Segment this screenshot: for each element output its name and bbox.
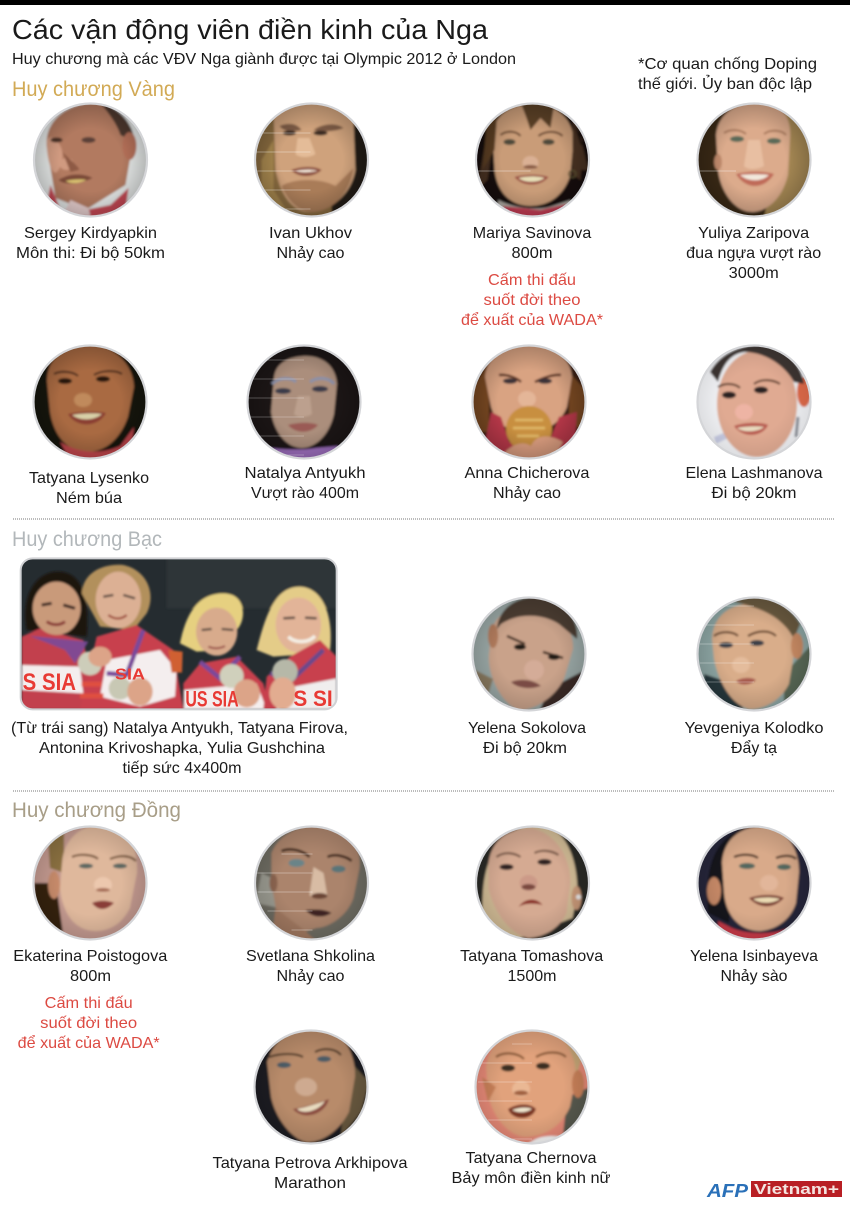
ban note: Cấm thi đấu <box>488 272 576 289</box>
panel: bronze medals <box>12 799 818 1192</box>
name and event <box>684 720 824 757</box>
athlete: Sergey Kirdyapkin <box>16 102 165 262</box>
name and event <box>686 225 821 282</box>
heading: silver: Huy chương Bạc <box>12 528 162 551</box>
name and event: Yevgeniya Kolodko <box>684 720 824 737</box>
ban note <box>461 272 603 329</box>
portrait <box>254 102 370 218</box>
athlete: Natalya Antyukh <box>244 344 366 502</box>
portrait <box>696 825 812 941</box>
heading: gold: Huy chương Vàng <box>12 78 175 101</box>
name and event: Ném búa <box>56 490 122 507</box>
name and event: Svetlana Shkolina <box>246 948 375 965</box>
ban note: để xuất của WADA* <box>18 1034 160 1052</box>
name and event: Môn thi: Đi bộ 50km <box>16 245 165 262</box>
team photo: relay 4x400m: S SI <box>293 686 333 711</box>
athlete: Elena Lashmanova <box>686 344 823 502</box>
ban note: Cấm thi đấu <box>45 995 133 1012</box>
name and event: Tatyana Chernova <box>466 1150 597 1167</box>
athlete: Ivan Ukhov <box>254 102 370 262</box>
name and event: Bảy môn điền kinh nữ <box>452 1170 611 1187</box>
portrait <box>696 102 812 218</box>
name and event: Nhảy cao <box>276 968 345 985</box>
portrait <box>32 344 148 460</box>
subtitle: Huy chương mà các VĐV Nga giành được tại Olympic 2012 ở London <box>12 51 516 68</box>
note: WADA definition <box>638 56 817 93</box>
title: Các vận động viên điền kinh của Nga <box>12 14 488 45</box>
name and event: Vượt rào 400m <box>251 485 359 502</box>
name and event <box>460 948 603 985</box>
logo: Vietnam+ <box>751 1181 842 1198</box>
logo: AFP: AFP <box>706 1181 749 1201</box>
name and event: Tatyana Lysenko <box>29 470 149 487</box>
athlete: Tatyana Lysenko <box>29 344 149 507</box>
name and event: Tatyana Petrova Arkhipova <box>212 1155 408 1172</box>
name and event: 800m <box>70 968 111 985</box>
athlete: Anna Chicherova <box>464 344 590 502</box>
team photo: relay 4x400m: US SIA <box>185 687 239 712</box>
name and event: Nhảy cao <box>493 485 561 502</box>
name and event <box>690 948 818 985</box>
ban note <box>18 995 160 1052</box>
name and event: 3000m <box>729 265 779 282</box>
team caption: tiếp sức 4x400m <box>122 760 242 777</box>
portrait <box>474 102 590 218</box>
name and event: Mariya Savinova <box>473 225 591 242</box>
name and event: Elena Lashmanova <box>686 465 823 482</box>
team photo: relay 4x400m: S SIA <box>23 669 76 696</box>
athlete: Mariya Savinova <box>461 102 603 329</box>
portrait <box>474 1029 590 1147</box>
name and event: Đi bộ 20km <box>483 740 567 757</box>
name and event <box>244 465 366 502</box>
ban note: suốt đời theo <box>40 1015 137 1032</box>
athlete: Yelena Sokolova <box>468 596 587 757</box>
name and event: Anna Chicherova <box>464 465 590 482</box>
portrait <box>474 825 590 941</box>
athlete: Yevgeniya Kolodko <box>684 596 824 757</box>
athlete: Svetlana Shkolina <box>246 825 375 985</box>
name and event: Nhảy cao <box>276 245 345 262</box>
team caption <box>11 720 348 777</box>
name and event: Marathon <box>274 1175 346 1192</box>
name and event <box>468 720 586 757</box>
portrait <box>696 596 812 712</box>
name and event: Tatyana Tomashova <box>460 948 603 965</box>
name and event: đua ngựa vượt rào <box>686 245 821 262</box>
name and event <box>29 470 149 507</box>
portrait <box>696 344 812 460</box>
athlete: Tatyana Chernova <box>452 1029 611 1187</box>
name and event: Đẩy tạ <box>731 739 777 757</box>
name and event <box>686 465 823 502</box>
portrait <box>32 824 148 941</box>
athlete: Yelena Isinbayeva <box>690 825 818 985</box>
portrait <box>32 102 148 220</box>
name and event <box>269 225 352 262</box>
portrait <box>253 1027 369 1145</box>
portrait <box>254 825 370 941</box>
logo: Vietnam+: Vietnam+ <box>754 1182 839 1198</box>
name and event: Nhảy sào <box>720 968 788 985</box>
name and event: Đi bộ 20km <box>712 485 796 502</box>
name and event <box>464 465 590 502</box>
panel: silver medals <box>11 528 824 777</box>
portrait <box>471 596 587 712</box>
name and event: Ekaterina Poistogova <box>13 948 167 965</box>
athlete: Tatyana Tomashova <box>460 825 603 985</box>
name and event: Yelena Sokolova <box>468 720 586 737</box>
note: WADA definition: *Cơ quan chống Doping <box>638 56 817 73</box>
name and event: Natalya Antyukh <box>244 465 366 482</box>
name and event: Yuliya Zaripova <box>698 225 809 242</box>
athlete: Tatyana Petrova Arkhipova <box>212 1027 408 1192</box>
name and event <box>452 1150 611 1187</box>
name and event <box>473 225 591 262</box>
name and event: Ivan Ukhov <box>269 225 352 242</box>
name and event: 800m <box>512 245 552 262</box>
heading: bronze: Huy chương Đồng <box>12 799 181 822</box>
team photo: relay 4x400m: SIA <box>115 666 146 683</box>
name and event <box>16 225 165 262</box>
name and event <box>13 948 167 985</box>
athlete: Yuliya Zaripova <box>686 102 821 282</box>
name and event: Sergey Kirdyapkin <box>24 225 157 242</box>
portrait <box>246 344 362 460</box>
team photo: relay 4x400m <box>21 558 337 712</box>
name and event <box>212 1155 408 1192</box>
team caption: (Từ trái sang) Natalya Antyukh, Tatyana Firova, <box>11 720 348 737</box>
name and event: 1500m <box>508 968 556 985</box>
portrait <box>471 344 587 462</box>
panel: gold medals <box>12 78 823 507</box>
team caption: Antonina Krivoshapka, Yulia Gushchina <box>39 740 325 757</box>
note: WADA definition: thế giới. Ủy ban độc lập <box>638 74 812 93</box>
name and event <box>246 948 375 985</box>
athlete: Ekaterina Poistogova <box>13 824 167 1052</box>
ban note: để xuất của WADA* <box>461 311 603 329</box>
ban note: suốt đời theo <box>484 292 581 309</box>
name and event: Yelena Isinbayeva <box>690 948 818 965</box>
